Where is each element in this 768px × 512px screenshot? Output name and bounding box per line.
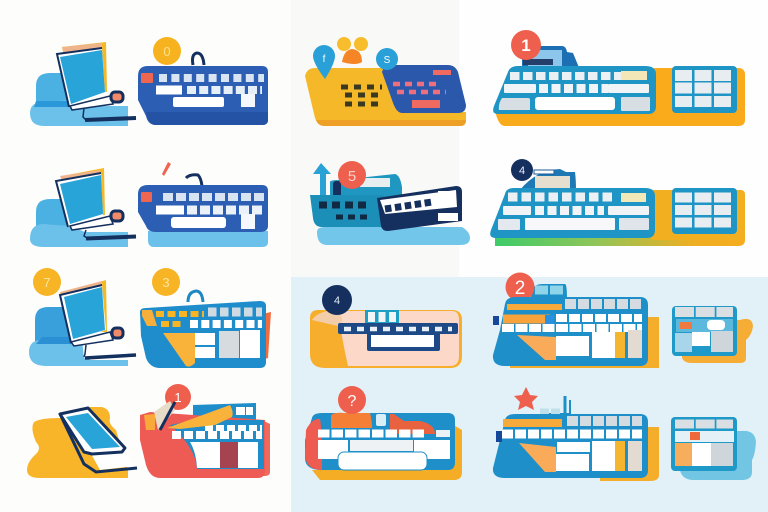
icon: red numbered badge: 2 [515, 278, 525, 299]
icon: red question badge [338, 386, 366, 414]
icon: blue pin right [376, 48, 398, 70]
panel: laptop row 1 [30, 42, 136, 126]
panel: laptop row 3 [29, 268, 136, 366]
panel: multicolour keyboard row 3 [493, 272, 753, 368]
icon: red numbered badge [506, 272, 534, 302]
icon: yellow badge: 3 [162, 275, 170, 290]
icon: navy badge [511, 159, 533, 181]
icon: navy badge [322, 285, 352, 315]
icon: red numbered badge: 1 [521, 36, 531, 55]
icon: yellow badge: 7 [43, 275, 51, 290]
icon: navy badge: 4 [334, 295, 340, 307]
icon: blue pin left: f [323, 54, 326, 65]
numeric keypad [672, 188, 737, 234]
numeric keypad [672, 66, 737, 113]
numeric keypad with tile panes [672, 306, 753, 363]
icon: orange butterfly [337, 37, 368, 64]
icon: blue pin left [313, 45, 335, 79]
panel: navy keyboard row 2 [138, 162, 268, 247]
panel: yellow and blue keypad row 1 [305, 37, 466, 126]
panel: laptop row 2 [30, 168, 136, 247]
numeric keypad with tile panes [671, 417, 756, 480]
icon: navy badge: 4 [519, 165, 525, 177]
panel: phone row 4 [27, 407, 137, 478]
panel: multicolour keyboard row 4 [493, 387, 756, 481]
panel: teal keyboard row 2 [490, 159, 745, 246]
panel: peach card row 3 [310, 285, 462, 368]
icon: red numbered badge [511, 30, 541, 60]
panel: red keyboard row 4 [140, 384, 270, 478]
panel: blue keyboard with yellow wedge row 3 [140, 268, 271, 368]
icon: red badge: 1 [174, 390, 182, 405]
icon: red refresh badge: 5 [348, 168, 356, 185]
panel: blue and red keyboard row 4 [305, 386, 462, 480]
arrow: up [313, 163, 331, 195]
panel: teal and navy cards row 2 [310, 161, 470, 245]
panel: teal keyboard row 1 [493, 30, 745, 126]
panel: pale blue background [291, 277, 768, 512]
icon: red question badge: ? [348, 393, 357, 410]
icon: blue pin right: S [384, 55, 391, 66]
icon: yellow badge: 0 [163, 44, 171, 59]
icon: red star [514, 387, 538, 410]
panel: navy keyboard row 1 [138, 37, 268, 125]
icon: red refresh badge [338, 161, 366, 189]
